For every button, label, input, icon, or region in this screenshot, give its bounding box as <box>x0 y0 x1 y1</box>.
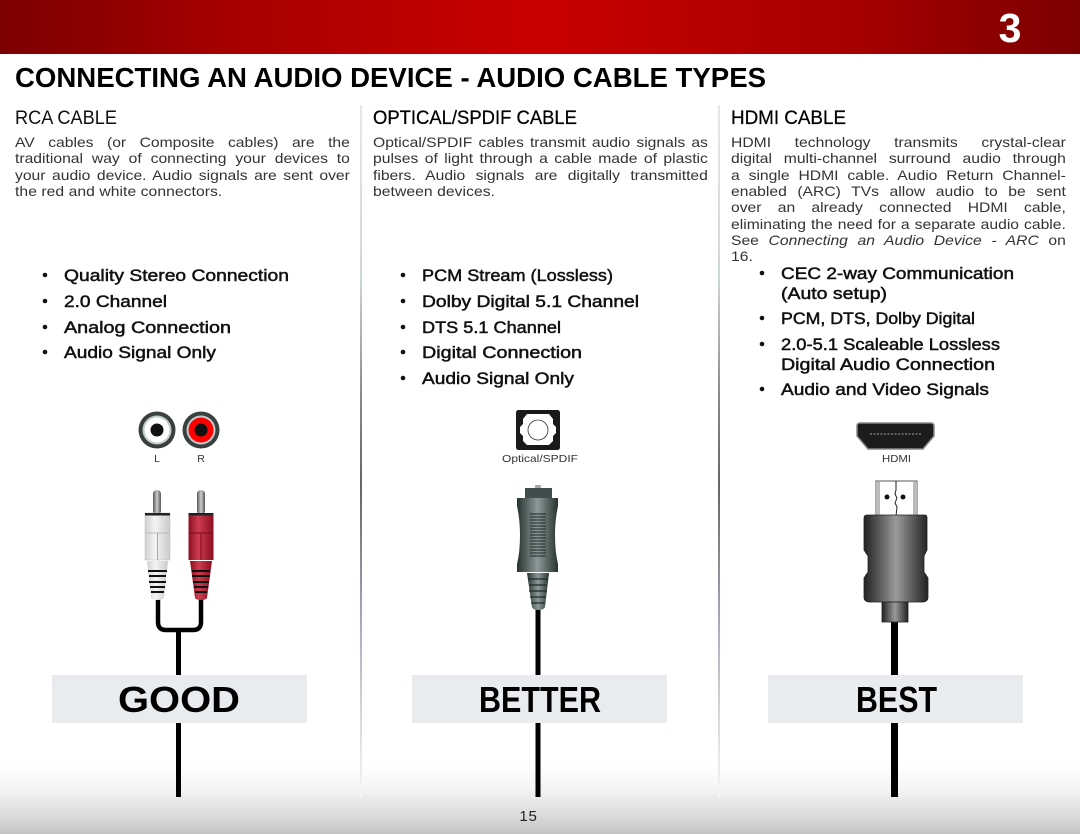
chapter number: 3 <box>999 5 1021 51</box>
heading: RCA cable: RCA CABLE <box>15 107 117 129</box>
icon: HDMI port <box>857 423 934 465</box>
bullet list: optical: Dolby Digital 5.1 Channel <box>422 292 639 311</box>
bullet list: RCA: Audio Signal Only <box>64 343 217 362</box>
text block: optical description: Optical/SPDIF cables transmit audio signals as <box>373 134 708 150</box>
rating: better <box>412 675 667 723</box>
text block: RCA description: your audio device. Audio signals are sent over <box>15 167 350 183</box>
bullet list: RCA <box>43 266 289 362</box>
bullet list: optical <box>401 266 639 388</box>
text block: RCA description: AV cables (or Composite cables) are the <box>15 134 350 150</box>
text block: optical description: pulses of light through a cable made of plastic <box>373 150 708 166</box>
text block: RCA description: traditional way of connecting your devices to <box>15 150 350 166</box>
bottom grey fade <box>0 765 1080 834</box>
icon: optical port <box>502 410 578 465</box>
icon: HDMI port: HDMI <box>882 453 911 465</box>
text block: HDMI description: a single HDMI cable. Audio Return Channel- <box>731 167 1066 183</box>
text block: HDMI description <box>731 134 1066 264</box>
icon: optical port: Optical/SPDIF <box>502 453 578 465</box>
bullet list: HDMI: Audio and Video Signals <box>781 380 989 399</box>
rating: better: BETTER <box>479 679 601 720</box>
cable: HDMI <box>891 620 898 797</box>
icon: RCA jacks: R <box>197 453 205 465</box>
optical plug <box>517 485 558 610</box>
panel: Optical/SPDIF cable <box>373 107 708 797</box>
panel: HDMI cable <box>731 107 1066 797</box>
bullet list: HDMI <box>760 264 1014 399</box>
rating: best <box>768 675 1023 723</box>
bullet list: HDMI: CEC 2-way Communication <box>781 264 1014 283</box>
text block: HDMI description: HDMI technology transmits crystal-clear <box>731 134 1066 150</box>
column divider left <box>360 105 362 798</box>
bullet list: RCA: 2.0 Channel <box>64 292 167 311</box>
white RCA plug <box>145 490 170 600</box>
heading: HDMI cable: HDMI CABLE <box>731 107 846 129</box>
red RCA plug <box>188 490 214 600</box>
panel: RCA cable <box>15 107 350 797</box>
text block: HDMI description: 16. <box>731 248 753 264</box>
text block: RCA description: the red and white connectors. <box>15 183 222 199</box>
text block: optical description <box>373 134 708 199</box>
bullet list: optical: PCM Stream (Lossless) <box>422 266 613 285</box>
bullet list: optical: Digital Connection <box>422 343 582 362</box>
rating: good: GOOD <box>118 679 240 720</box>
bullet list: RCA: Analog Connection <box>64 318 231 337</box>
bullet list: HDMI: PCM, DTS, Dolby Digital <box>781 309 975 328</box>
text block: HDMI description: enabled (ARC) TVs allow audio to be sent <box>731 183 1066 199</box>
column divider right <box>718 105 720 798</box>
text block: HDMI description: over an already connected HDMI cable, <box>731 199 1066 215</box>
heading: optical cable: OPTICAL/SPDIF CABLE <box>373 107 577 129</box>
page number: 15 <box>519 808 538 825</box>
text block: RCA description <box>15 134 350 199</box>
text block: HDMI description: eliminating the need for a separate audio cable. <box>731 216 1066 232</box>
icon: RCA jacks <box>138 412 220 465</box>
icon: RCA jacks: L <box>154 453 160 465</box>
bullet list: HDMI: 2.0-5.1 Scaleable Lossless <box>781 335 1000 354</box>
bullet list: HDMI: Digital Audio Connection <box>781 355 995 374</box>
text block: optical description: fibers. Audio signals are digitally transmitted <box>373 167 708 183</box>
rating: best: BEST <box>856 679 937 720</box>
bullet list: HDMI: (Auto setup) <box>781 284 887 303</box>
header bar <box>0 0 1080 54</box>
title: CONNECTING AN AUDIO DEVICE - AUDIO CABLE TYPES <box>15 62 766 93</box>
HDMI plug <box>864 481 928 622</box>
bullet list: RCA: Quality Stereo Connection <box>64 266 289 285</box>
bullet list: optical: Audio Signal Only <box>422 369 575 388</box>
cable: optical <box>536 608 540 797</box>
rating: good <box>52 675 307 723</box>
text block: HDMI description: digital multi-channel surround audio through <box>731 150 1066 166</box>
bullet list: optical: DTS 5.1 Channel <box>422 318 561 337</box>
text block: optical description: between devices. <box>373 183 495 199</box>
cable: Y split <box>158 598 201 797</box>
